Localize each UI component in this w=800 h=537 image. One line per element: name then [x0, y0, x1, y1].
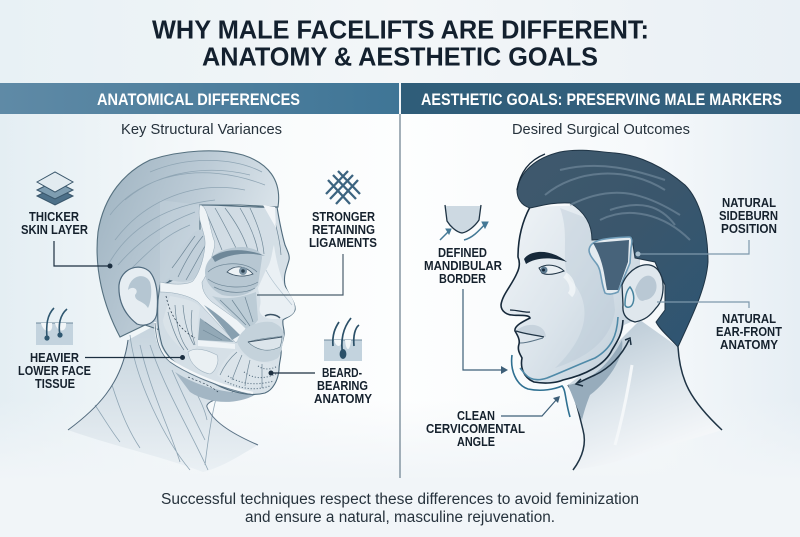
- leader: beard-bearing anatomy: [268, 370, 315, 376]
- label: natural ear-front anatomy: EAR-FRONT: [716, 325, 782, 339]
- jaw double arrow: [576, 338, 631, 386]
- footer text: and ensure a natural, masculine rejuvenation.: [245, 509, 555, 526]
- nose: [258, 245, 295, 319]
- hair: [97, 151, 279, 337]
- label: natural ear-front anatomy: NATURAL: [722, 312, 776, 326]
- ear: [622, 265, 663, 322]
- label: thicker skin layer: THICKER: [29, 210, 79, 224]
- label: stronger retaining ligaments: STRONGER: [312, 210, 375, 224]
- icon: defined mandibular border: [440, 205, 488, 240]
- leader: thicker skin layer: [54, 241, 112, 268]
- leader arrow: mandibular border: [463, 289, 508, 374]
- title: ANATOMY & AESTHETIC GOALS: [202, 44, 598, 72]
- label: stronger retaining ligaments: [309, 210, 377, 250]
- label: natural sideburn position: NATURAL: [722, 196, 776, 210]
- leader: natural ear-front anatomy: [657, 302, 749, 308]
- cervicomental contour: [512, 355, 570, 417]
- label: clean cervicomental angle: [426, 409, 525, 449]
- label: defined mandibular border: [424, 246, 502, 286]
- subheading: key structural variances: Key Structural Variances: [121, 122, 282, 138]
- label: thicker skin layer: [21, 210, 88, 237]
- footer text: [161, 491, 639, 526]
- label: natural sideburn position: [719, 196, 778, 236]
- label: defined mandibular border: MANDIBULAR: [424, 259, 502, 273]
- header band: aesthetic goals: [401, 83, 800, 114]
- label: beard-bearing anatomy: BEARING: [317, 379, 368, 393]
- icon: beard follicles: [324, 318, 362, 361]
- panel: anatomical head illustration: [68, 151, 295, 472]
- label: natural ear-front anatomy: ANATOMY: [720, 338, 779, 352]
- label: heavier lower face tissue: TISSUE: [35, 377, 75, 391]
- title: [152, 16, 649, 72]
- temporal muscle: [170, 229, 207, 282]
- label: clean cervicomental angle: CERVICOMENTAL: [426, 422, 525, 436]
- label: stronger retaining ligaments: LIGAMENTS: [309, 236, 377, 250]
- label: heavier lower face tissue: LOWER FACE: [18, 364, 91, 378]
- neck muscles: [68, 320, 258, 472]
- label: heavier lower face tissue: [18, 351, 91, 391]
- label: beard-bearing anatomy: ANATOMY: [314, 392, 373, 406]
- orbit and eye: [205, 247, 265, 296]
- eyebrow and eye: [524, 252, 567, 274]
- panel divider: [399, 114, 401, 478]
- footer text: Successful techniques respect these differences to avoid feminization: [161, 491, 639, 508]
- face: [158, 205, 295, 394]
- header band: anatomical differences: ANATOMICAL DIFFERENCES: [97, 91, 300, 109]
- face: [501, 205, 640, 383]
- retaining ligament bands: [160, 205, 247, 349]
- sideburn outline: [589, 237, 632, 294]
- nose and mouth: [510, 275, 572, 343]
- leader: heavier lower face tissue: [85, 355, 185, 360]
- hair: [517, 150, 708, 347]
- leader: stronger retaining ligaments: [257, 254, 343, 295]
- beard stubble: [225, 366, 278, 389]
- label: clean cervicomental angle: CLEAN: [457, 409, 495, 423]
- cheek levator muscles: [204, 292, 258, 340]
- leader: natural sideburn position: [636, 240, 749, 256]
- icon: skin layers: [37, 172, 73, 205]
- label: clean cervicomental angle: ANGLE: [457, 435, 495, 449]
- label: defined mandibular border: DEFINED: [438, 246, 487, 260]
- label: beard-bearing anatomy: BEARD-: [322, 366, 362, 380]
- jaw contour: [520, 317, 618, 380]
- label: natural sideburn position: SIDEBURN: [719, 209, 778, 223]
- ear: [119, 267, 157, 325]
- icon: retaining ligaments: [326, 171, 360, 204]
- label: beard-bearing anatomy: [314, 366, 373, 406]
- header band: anatomical differences: [0, 83, 399, 114]
- label: heavier lower face tissue: HEAVIER: [30, 351, 79, 365]
- label: natural ear-front anatomy: [716, 312, 782, 352]
- leader arrow: cervicomental angle: [501, 396, 560, 416]
- label: thicker skin layer: SKIN LAYER: [21, 223, 88, 237]
- panel: aesthetic head illustration: [501, 150, 722, 470]
- label: defined mandibular border: BORDER: [439, 272, 486, 286]
- icon: hair follicles: [36, 308, 73, 345]
- label: natural sideburn position: POSITION: [721, 222, 777, 236]
- title: WHY MALE FACELIFTS ARE DIFFERENT:: [152, 16, 649, 44]
- subheading: desired surgical outcomes: Desired Surgical Outcomes: [512, 122, 690, 138]
- jaw line and dashed incision: [155, 296, 253, 395]
- lower-face muscles: [163, 296, 284, 388]
- label: stronger retaining ligaments: RETAINING: [312, 223, 375, 237]
- neck: [568, 320, 722, 470]
